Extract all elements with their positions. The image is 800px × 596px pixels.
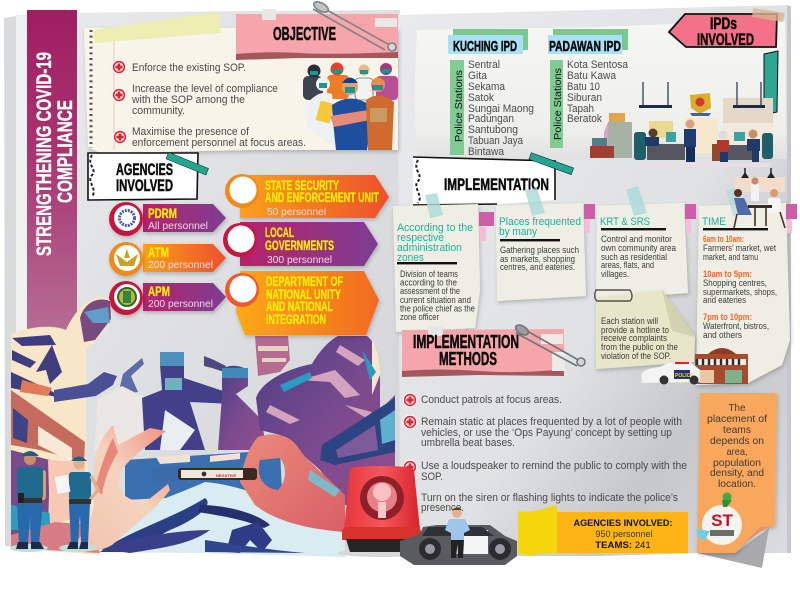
Padawan IPD: Police Stations	[552, 68, 564, 140]
note: time: Waterfront, bistros,	[703, 321, 769, 331]
badge: APM: APM	[148, 284, 170, 299]
note: places frequented: as markets, shopping	[500, 254, 575, 264]
note: time: supermarkets, shops,	[703, 287, 777, 297]
note: time: 7pm to 10pm:	[703, 312, 752, 322]
note: administration zones: respective	[397, 232, 444, 244]
title text	[33, 52, 77, 256]
blue device	[125, 450, 282, 500]
arm and glove	[54, 372, 117, 402]
Padawan IPD	[548, 29, 628, 148]
heading: agencies involved: AGENCIES	[116, 161, 173, 179]
illustration: police office	[590, 51, 778, 167]
note: time: Shopping centres,	[703, 278, 767, 288]
illustration: police car and officer	[400, 508, 517, 565]
illustration: red siren	[337, 466, 427, 557]
note: places frequented	[496, 188, 595, 301]
note: team placement: density, and	[710, 467, 764, 479]
panel: objective	[84, 0, 398, 153]
banner: local governments	[223, 222, 378, 266]
note: station hotline: provide a hotline to	[601, 325, 669, 335]
note: KRT and SRS: villages.	[601, 269, 629, 279]
panel: agencies total: AGENCIES INVOLVED:	[574, 518, 672, 529]
background figure, top left	[11, 296, 112, 555]
note: station hotline: from the public on the	[601, 342, 678, 352]
note: KRT and SRS: such as residential	[601, 252, 667, 262]
list: implementation methods	[403, 393, 687, 514]
Kuching IPD: Padungan	[468, 113, 514, 125]
heading: agencies involved	[88, 152, 209, 200]
note: KRT and SRS: areas, flats, and	[601, 260, 654, 270]
Kuching IPD: Police Stations	[453, 70, 465, 142]
Kuching IPD: Sentral	[468, 59, 500, 71]
banner: state security and enforcement unit: AND ENFORCEMENT UNIT	[265, 190, 379, 205]
note: station hotline: Each station will	[601, 316, 658, 326]
test tube: NEGATIVE	[216, 473, 236, 478]
badge: PDRM: All personnel	[148, 221, 208, 232]
Padawan IPD: Tapah	[567, 103, 594, 115]
Kuching IPD: Santubong	[468, 124, 518, 136]
title text: COMPLIANCE	[54, 100, 77, 203]
Kuching IPD: Bintawa	[468, 146, 504, 158]
illustration: frontline workers	[303, 62, 398, 150]
note: KRT and SRS: Control and monitor	[601, 234, 672, 244]
note: team placement	[697, 393, 777, 568]
note: places frequented: centres, and eateries.	[500, 262, 575, 272]
banner: department of national unity: INTEGRATION	[266, 312, 326, 327]
illustration: medical team	[11, 296, 395, 557]
note: administration zones: zones	[397, 252, 424, 264]
note: time	[696, 187, 797, 385]
panel: IPD stations	[414, 20, 787, 160]
left frame	[11, 390, 85, 462]
title spine	[27, 10, 77, 332]
heading: implementation: IMPLEMENTATION	[444, 175, 549, 194]
heading: objective	[236, 9, 398, 60]
note: administration zones: according to the	[400, 278, 457, 288]
note: time: and eateries	[703, 295, 746, 305]
note: station hotline	[595, 290, 695, 369]
Kuching IPD: KUCHING IPD	[453, 39, 517, 55]
heading: IPDs involved	[669, 8, 785, 49]
objective items: with the SOP among the	[131, 94, 245, 106]
badge: PDRM	[109, 202, 226, 236]
illustration: cafe diners	[734, 168, 785, 228]
badge: PDRM: PDRM	[148, 206, 177, 221]
badge: ATM: ATM	[148, 245, 169, 260]
Kuching IPD	[448, 29, 534, 158]
Kuching IPD: Sekama	[468, 81, 505, 93]
list: implementation methods: vehicles, or use the ‘Ops Payung’ concept by setting up	[421, 427, 672, 439]
list: implementation methods: SOP.	[421, 471, 443, 483]
right figures	[255, 336, 290, 376]
note: administration zones: the police chief as the	[400, 304, 475, 314]
Padawan IPD: Kota Sentosa	[567, 59, 628, 71]
illustration: small police car	[641, 362, 700, 384]
panel: agencies total: TEAMS: 241	[595, 540, 651, 551]
panel: agencies total: 950 personnel	[596, 528, 652, 539]
note: time: 10am to 5pm:	[703, 269, 752, 279]
heading: implementation methods	[402, 323, 585, 377]
note: KRT and SRS: own community area	[601, 243, 676, 253]
Kuching IPD: Sungai Maong	[468, 103, 534, 115]
heading: implementation methods: IMPLEMENTATION	[413, 332, 519, 352]
badge: ATM: 200 personnel	[148, 260, 213, 271]
panel: agencies total	[518, 505, 688, 555]
note: places frequented: Places frequented	[499, 216, 581, 228]
Padawan IPD: PADAWAN IPD	[549, 39, 621, 55]
note: KRT and SRS	[596, 186, 696, 300]
banner: state security and enforcement unit: STATE SECURITY	[265, 178, 339, 193]
logo: ST	[696, 492, 742, 545]
Kuching IPD: Satok	[468, 92, 495, 104]
banner: department of national unity	[225, 271, 379, 335]
Padawan IPD: Batu Kawa	[567, 70, 616, 82]
objective items: community.	[132, 105, 185, 117]
test tube	[152, 467, 257, 481]
hand right	[240, 434, 345, 532]
note: team placement: area,	[726, 446, 748, 458]
note: time: TIME	[702, 216, 726, 228]
Kuching IPD: Gita	[468, 70, 487, 82]
banner: state security and enforcement unit: 50 personnel	[267, 207, 326, 218]
list: implementation methods: Use a loudspeaker to remind the public to comply with the	[421, 460, 687, 472]
note: administration zones: administration	[397, 242, 462, 254]
banner: local governments: LOCAL	[265, 225, 294, 240]
Padawan IPD: Siburan	[567, 92, 602, 104]
note: team placement: teams	[723, 424, 751, 436]
note: administration zones: current situation and	[400, 295, 471, 305]
Padawan IPD: Batu 10	[567, 81, 600, 93]
icon: safety pin	[514, 323, 585, 366]
objective items: Enforce the existing SOP.	[132, 62, 246, 74]
waves	[90, 482, 345, 557]
note: team placement: depends on	[710, 435, 764, 447]
illustration: small police car: POLICE	[675, 373, 694, 379]
banner: department of national unity: NATIONAL UNITY	[266, 287, 341, 302]
objective items	[112, 60, 306, 149]
list: implementation methods: Conduct patrols at focus areas.	[421, 394, 562, 406]
Padawan IPD: Beratok	[567, 113, 603, 125]
note: administration zones	[393, 193, 494, 332]
illustration: police officers	[10, 451, 98, 552]
note: administration zones: assessment of the	[400, 286, 460, 296]
note: team placement: location.	[718, 478, 756, 490]
list: implementation methods: Remain static at places frequented by a lot of people with	[421, 416, 682, 428]
badge: APM: 200 personnel	[148, 299, 213, 310]
note: KRT and SRS: KRT & SRS	[600, 216, 650, 228]
heading: agencies involved: INVOLVED	[116, 177, 173, 195]
note: administration zones: Division of teams	[400, 269, 458, 279]
banner: department of national unity: DEPARTMENT OF	[266, 274, 343, 289]
objective items: Increase the level of compliance	[132, 83, 278, 95]
note: places frequented: by many	[499, 226, 537, 238]
note: team placement: population	[713, 457, 761, 469]
note: team placement: The	[728, 402, 746, 414]
illustration: restaurant	[695, 348, 748, 384]
heading: IPDs involved: IPDs	[710, 14, 737, 33]
badge: ATM	[109, 242, 226, 276]
note: team placement: placement of	[707, 413, 767, 425]
list: implementation methods: presence.	[421, 502, 464, 514]
list: implementation methods: Turn on the siren or flashing lights to indicate the police’s	[421, 492, 679, 504]
banner: local governments: GOVERNMENTS	[265, 238, 334, 253]
heading: IPDs involved: INVOLVED	[697, 30, 754, 49]
centre figures	[94, 352, 266, 450]
note: time: market, and tamu	[703, 252, 758, 262]
heading: implementation methods: METHODS	[439, 349, 497, 369]
list: implementation methods: umbrella beat bases.	[421, 437, 515, 449]
right frame	[320, 398, 395, 465]
hand left	[72, 425, 170, 551]
note: places frequented: Gathering places such	[500, 245, 579, 255]
logo: ST: ST	[711, 511, 733, 530]
icon: safety pin	[312, 0, 396, 51]
note: administration zones: According to the	[397, 222, 473, 234]
heading: implementation	[413, 153, 574, 205]
note: time: and others	[703, 330, 743, 340]
banner: local governments: 300 personnel	[267, 255, 332, 266]
badge: APM	[109, 281, 226, 315]
Kuching IPD: Tabuan Jaya	[468, 135, 523, 147]
note: station hotline: receive complaints	[601, 333, 668, 343]
note: administration zones: zone officer	[400, 312, 439, 322]
note: time: Farmers’ market, wet	[703, 243, 776, 253]
banner: department of national unity: AND NATIONAL	[266, 299, 333, 314]
heading: objective: OBJECTIVE	[273, 24, 336, 44]
note: time: 6am to 10am:	[703, 234, 744, 244]
objective items: enforcement personnel at focus areas.	[132, 137, 306, 149]
objective items: Maximise the presence of	[132, 126, 250, 138]
banner: state security and enforcement unit	[225, 174, 389, 218]
note: station hotline: violation of the SOP.	[601, 351, 671, 361]
